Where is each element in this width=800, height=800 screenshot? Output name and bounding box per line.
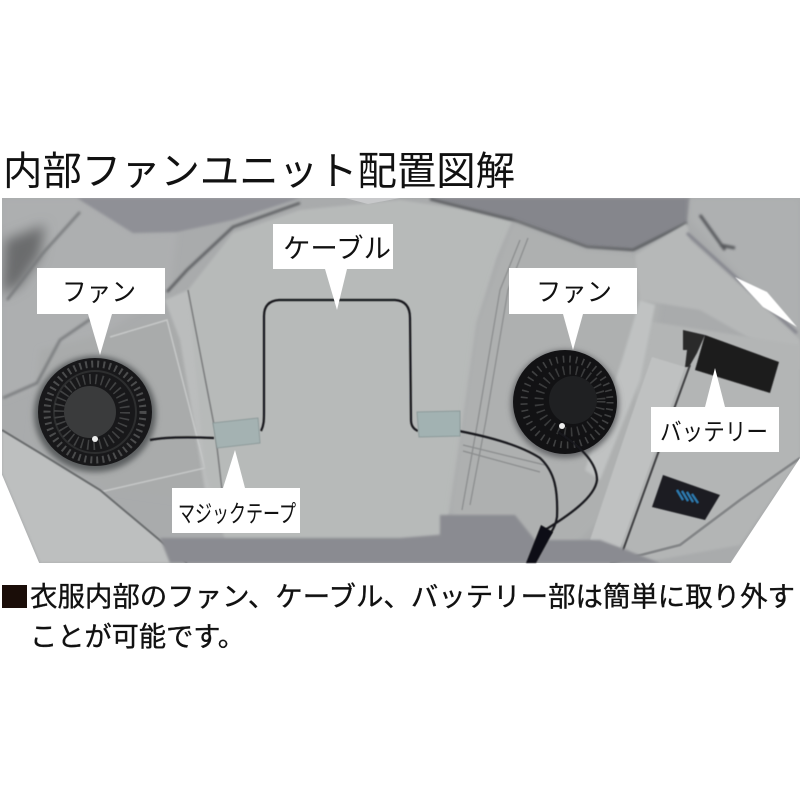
fan body [513, 350, 617, 454]
collar left [77, 198, 300, 233]
battery [683, 330, 779, 393]
title: 内部ファンユニット配置図解 [3, 150, 515, 194]
white corner bottom right [730, 458, 800, 564]
fan outer grill [47, 364, 143, 460]
white corner bottom left [2, 475, 40, 563]
fan hub [64, 386, 116, 438]
left lapel edge [2, 430, 187, 563]
left shadow fold [2, 225, 45, 295]
right panel [512, 220, 611, 250]
jacket brand tag [652, 475, 720, 520]
fan body [38, 358, 152, 466]
central back panel [188, 200, 513, 540]
label: cable: ケーブル [283, 234, 391, 264]
pocket stitching [100, 320, 205, 492]
caption: 衣服内部のファン、ケーブル、バッテリー部は簡単に取り外す [30, 581, 795, 612]
label: battery [651, 368, 779, 452]
caption: ことが可能です。 [30, 621, 245, 652]
pocket edge [622, 365, 690, 553]
label: fan left [37, 268, 165, 355]
battery clip [683, 330, 705, 367]
right velcro patch [417, 411, 460, 437]
fan hub [549, 376, 597, 424]
black square bullet [2, 585, 27, 608]
fan outer grill [524, 359, 610, 445]
fan shadow [34, 356, 156, 472]
photo: open jacket interior [0, 198, 800, 565]
neck tag [345, 198, 400, 204]
left seam diagonal [2, 210, 90, 400]
label: fan left: ファン [62, 277, 136, 307]
right upper lapel [636, 222, 800, 344]
fan screw [559, 423, 565, 429]
left upper lining [2, 198, 177, 400]
bottom dark hem left [160, 515, 660, 563]
right lower edge [610, 458, 800, 563]
left pocket panel [30, 318, 215, 500]
left placket strip [166, 291, 210, 488]
fan screw [92, 436, 98, 442]
battery body [695, 335, 779, 393]
hem dark band [230, 560, 560, 562]
pocket flap [590, 357, 685, 548]
label: fan right: ファン [536, 277, 612, 307]
pocket strip light [585, 300, 655, 480]
label: magic tape: マジックテープ [178, 501, 296, 528]
right fan [511, 350, 619, 458]
right seam [462, 238, 545, 510]
label: fan right [509, 268, 637, 350]
cable [150, 300, 597, 545]
label: cable [273, 224, 393, 310]
left seam [188, 290, 222, 490]
caption [30, 581, 795, 652]
right shoulder edge [687, 233, 797, 333]
collar right [430, 198, 690, 250]
right inner pocket [623, 324, 799, 559]
fan ring [54, 371, 136, 453]
label: magic tape [172, 450, 300, 533]
brand mark [677, 490, 698, 503]
right shoulder [688, 200, 690, 207]
fan inner grill [539, 370, 601, 432]
left velcro patch [213, 418, 260, 448]
right shoulder shadow [700, 215, 735, 250]
left lapel flap [2, 432, 170, 563]
label: battery: バッテリー [660, 419, 768, 446]
neck edge shadow [167, 199, 687, 292]
cable connector [526, 525, 553, 563]
fan shadow [511, 350, 619, 458]
white wedge [735, 277, 797, 327]
left fan [34, 356, 156, 472]
fan inner grill [59, 379, 125, 445]
